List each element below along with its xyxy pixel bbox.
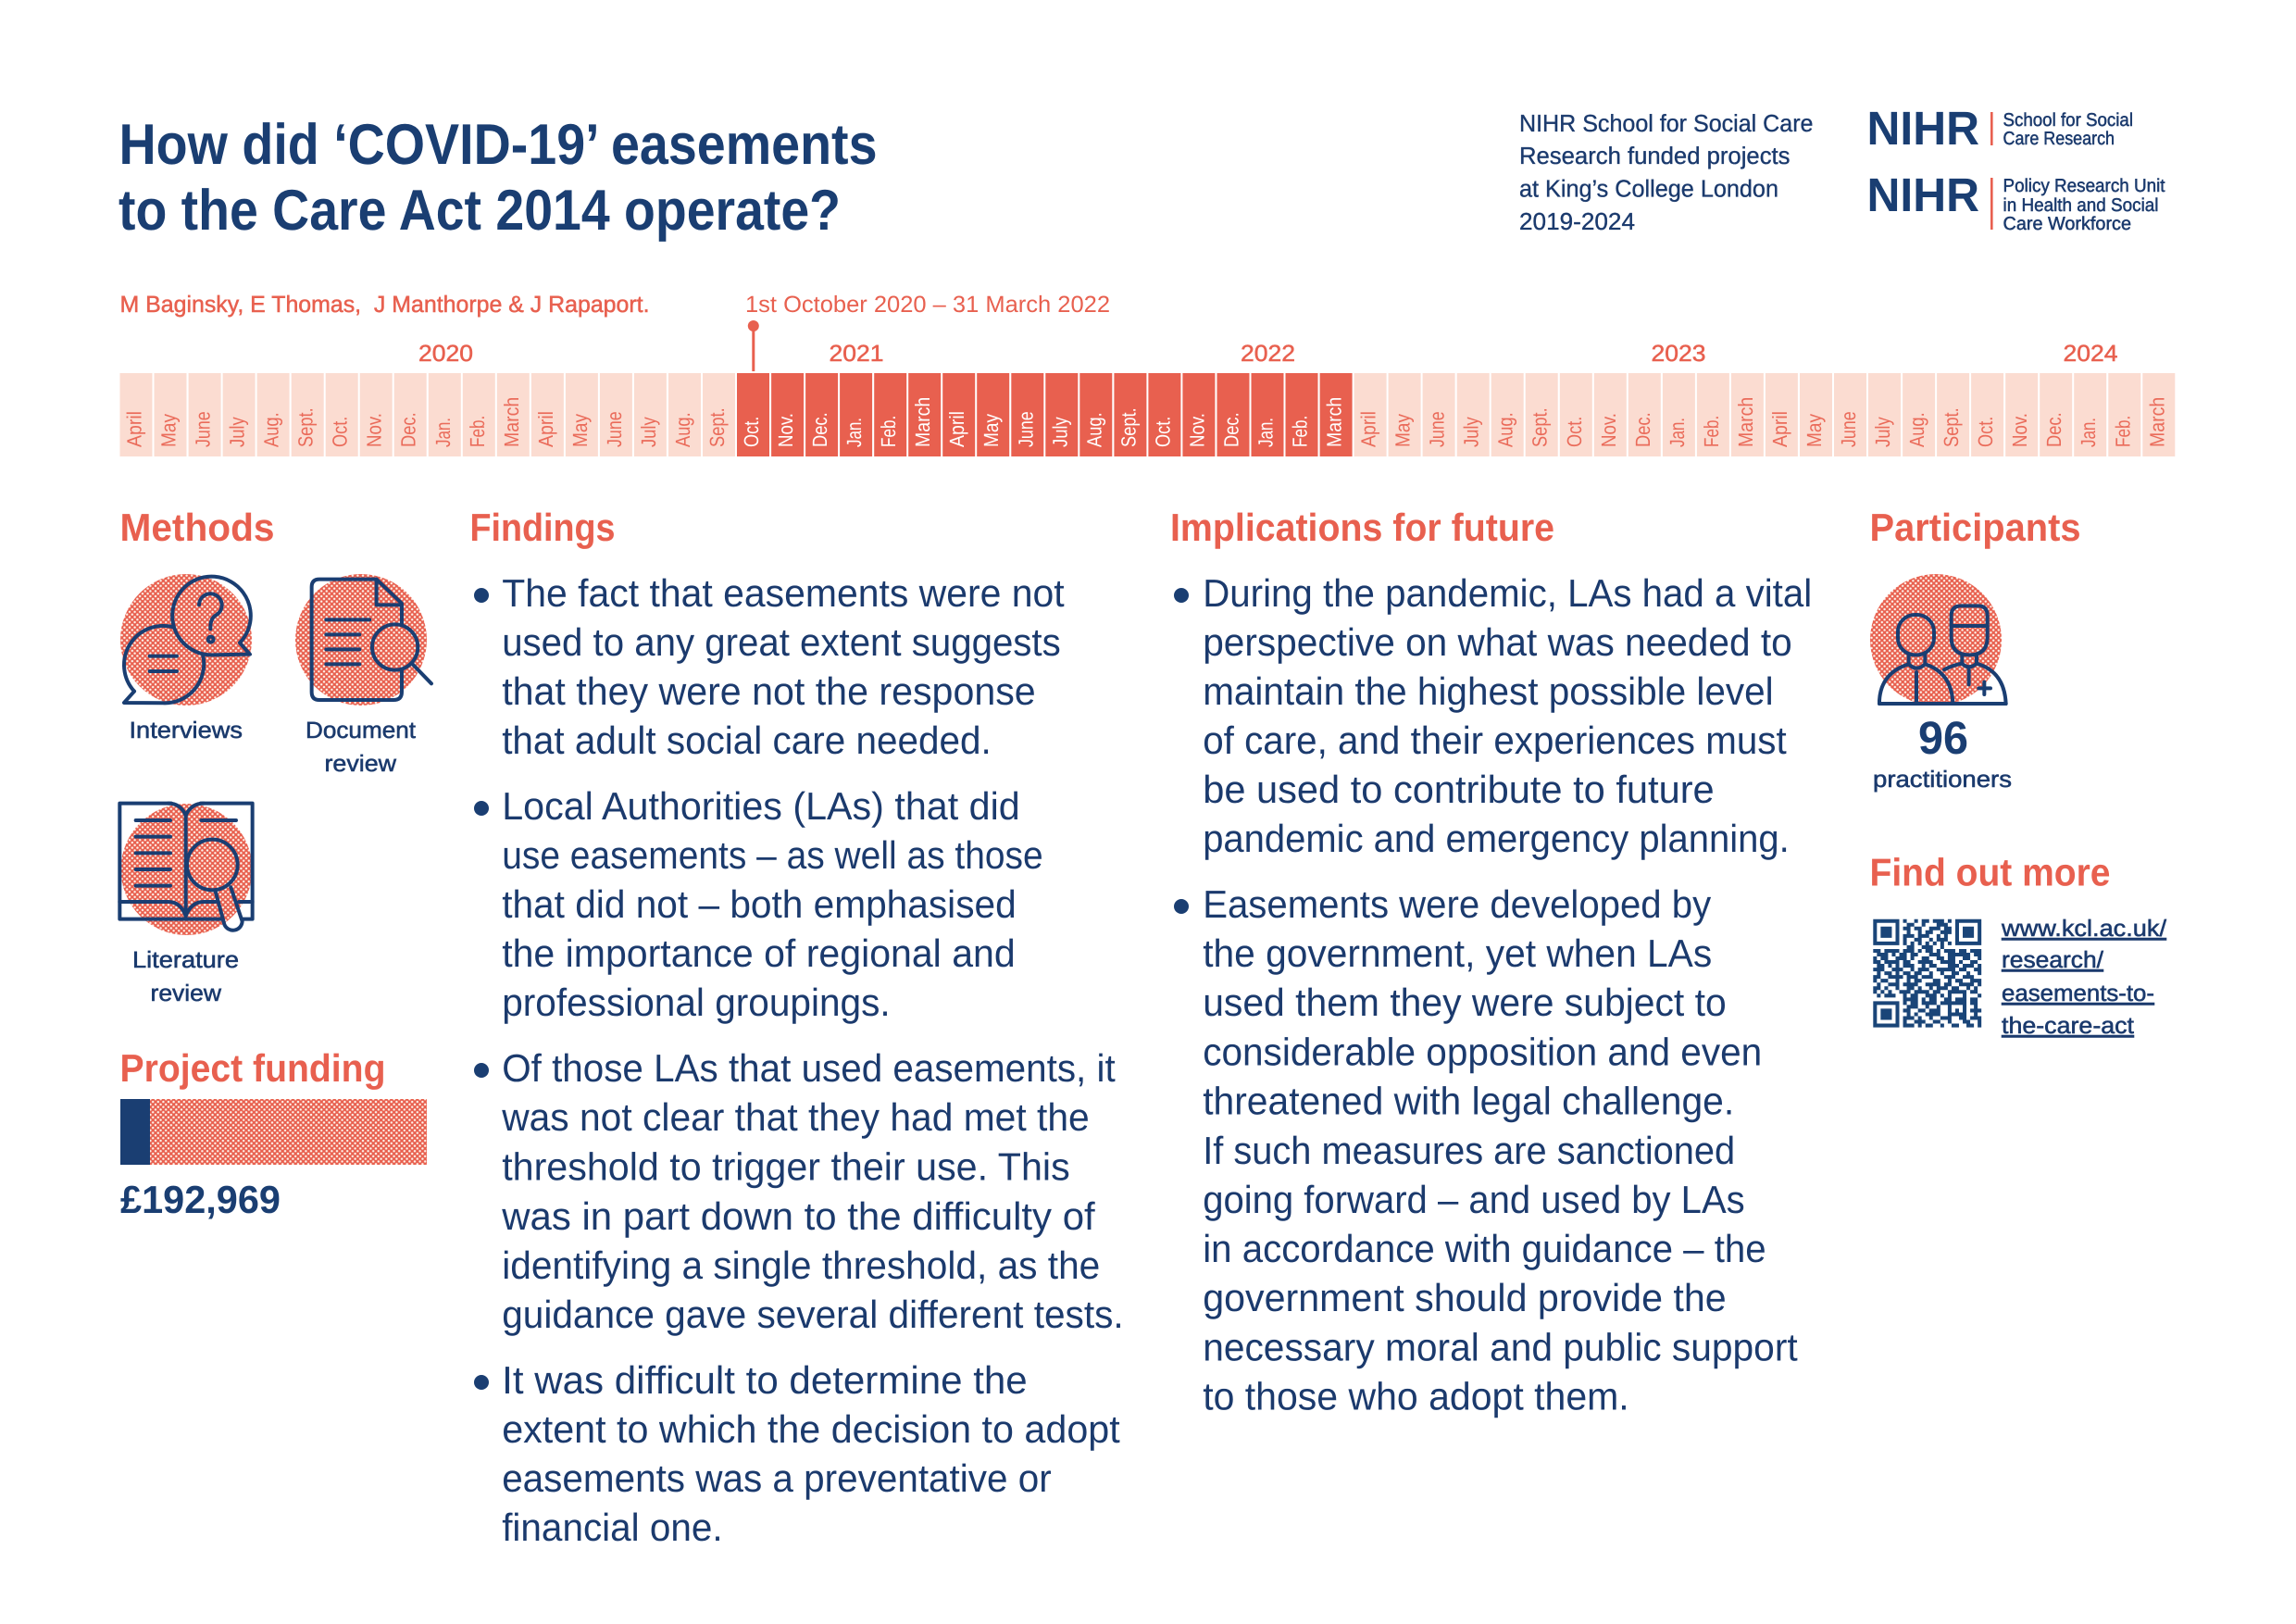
implication 2: If such measures are sanctioned [1203,1129,1735,1172]
timeline of months: Aug. [1082,412,1105,447]
authors: M Baginsky, E Thomas, J Manthorpe & J Rapaport. [120,292,650,318]
implication 2: to those who adopt them. [1203,1374,1629,1418]
timeline of months: April [945,411,968,447]
year labels: 2023 [1652,341,1705,367]
timeline of months: Sept. [1940,407,1963,447]
funding statement: Research funded projects [1519,142,1791,169]
finding 4: It was difficult to determine the [502,1358,1028,1402]
implication 2: in accordance with guidance – the [1203,1227,1766,1270]
timeline of months: May [980,414,1003,447]
period marker pin [748,320,759,371]
timeline of months: Dec. [397,412,420,447]
timeline of months: July [226,417,249,447]
timeline of months: Oct. [1974,417,1997,447]
funding statement: 2019-2024 [1519,207,1635,235]
finding 2: use easements – as well as those [502,833,1043,877]
finding 3: was not clear that they had met the [501,1095,1090,1139]
timeline of months: Sept. [294,407,318,447]
timeline of months: April [122,411,146,447]
timeline of months: Dec. [1631,412,1654,447]
implication 2: considerable opposition and even [1203,1030,1762,1074]
timeline of months: March [2145,397,2168,447]
timeline of months: Aug. [1494,412,1517,447]
implication 2: used them they were subject to [1203,981,1727,1024]
finding 2: Local Authorities (LAs) that did [502,784,1020,828]
panel: project funding [120,1046,427,1221]
icon: document review [295,574,431,706]
implication 2: government should provide the [1203,1276,1727,1319]
label: document review [306,718,416,777]
timeline of months: June [1837,411,1860,447]
heading: implications for future: Implications for future [1170,506,1554,549]
QR code [1873,921,1981,1026]
timeline of months: March [500,397,523,447]
link: project web address [2001,916,2166,1039]
timeline of months: May [1803,414,1826,447]
finding 1: that they were not the response [502,669,1036,713]
timeline of months: Aug. [1905,412,1928,447]
logo: NIHR School for Social Care Research: Care Research [2003,129,2115,149]
funding amount: £192,969 [120,1178,281,1221]
title: to the Care Act 2014 operate? [119,179,841,243]
funding statement: at King’s College London [1519,174,1778,202]
timeline of months: Dec. [808,412,831,447]
finding 3: Of those LAs that used easements, it [502,1046,1116,1090]
timeline of months: Oct. [1151,417,1174,447]
link: project web address: www.kcl.ac.uk/ [2001,916,2166,942]
logo: NIHR Policy Research Unit: Care Workforce [2003,214,2131,234]
timeline of months: Oct. [329,417,352,447]
finding 4: financial one. [502,1505,723,1549]
timeline of months: May [1391,414,1415,447]
finding 2: professional groupings. [502,981,891,1024]
easement period label: 1st October 2020 – 31 March 2022 [745,292,1110,318]
implication 2: Easements were developed by [1203,882,1711,926]
timeline of months: Feb. [466,416,489,447]
finding 1: used to any great extent suggests [502,620,1061,664]
finding 4 [474,1358,1120,1549]
finding 1: that adult social care needed. [502,718,992,762]
implication 2 [1174,882,1798,1418]
timeline of months: Dec. [2042,412,2065,447]
heading: methods: Methods [120,506,274,549]
timeline of months: April [534,411,557,447]
implication 1 [1174,571,1812,860]
logo: NIHR School for Social Care Research: NIHR [1866,102,1979,155]
timeline of months: Jan. [1254,418,1278,447]
panel: findings [470,506,1124,1549]
timeline of months: March [1734,397,1757,447]
panel: participants [1870,506,2081,793]
label: document review: Document [306,718,416,743]
timeline of months: Feb. [1700,416,1723,447]
timeline of months: Oct. [740,417,763,447]
title [119,113,878,243]
finding 3: guidance gave several different tests. [502,1293,1124,1336]
link: project web address: the-care-act [2002,1013,2134,1039]
funding statement [1519,109,1813,235]
timeline of months: Nov. [2008,413,2031,447]
finding 2: that did not – both emphasised [502,882,1017,926]
title: How did ‘COVID-19’ easements [119,113,878,177]
heading: findings: Findings [470,506,615,549]
timeline of months: Nov. [1597,413,1620,447]
link: project web address: research/ [2002,947,2103,973]
label: document review: review [324,751,397,777]
heading: participants: Participants [1870,506,2081,549]
finding 3 [474,1046,1124,1336]
timeline of months: Sept. [1529,407,1552,447]
label: literature review: Literature [132,947,239,973]
timeline of months: March [1323,397,1346,447]
logo: NIHR Policy Research Unit [1866,169,2165,234]
timeline of months: Nov. [1185,413,1208,447]
year labels: 2020 [418,341,473,367]
finding 2: the importance of regional and [502,931,1016,975]
participant count: 96 [1918,712,1968,764]
timeline of months: Sept. [1117,407,1140,447]
timeline of months: Oct. [1563,417,1586,447]
finding 3: was in part down to the difficulty of [501,1194,1095,1238]
implication 1: of care, and their experiences must [1203,718,1787,762]
timeline of months: April [1357,411,1380,447]
timeline of months: May [568,414,592,447]
label: literature review [132,947,239,1006]
implication 2: threatened with legal challenge. [1203,1080,1734,1122]
label: practitioners: practitioners [1873,767,2012,793]
implication 1: be used to contribute to future [1203,768,1715,811]
timeline of months: Nov. [774,413,797,447]
timeline of months: July [637,417,660,447]
logo: NIHR Policy Research Unit: NIHR [1866,169,1979,221]
implication 1: During the pandemic, LAs had a vital [1203,571,1812,615]
timeline of months: March [911,397,934,447]
finding 1 [474,571,1065,762]
timeline of months: Feb. [877,416,900,447]
timeline of months: Feb. [1289,416,1311,447]
timeline of months: April [1768,411,1791,447]
implication 2: going forward – and used by LAs [1203,1178,1745,1221]
funding statement: NIHR School for Social Care [1519,109,1813,137]
timeline of months: Nov. [363,413,386,447]
timeline of months: June [603,411,626,447]
label: literature review: review [150,981,222,1006]
timeline of months: Jan. [2077,418,2100,447]
timeline of months: June [192,411,215,447]
logo: NIHR School for Social Care Research [1866,102,2133,155]
timeline of months: Aug. [260,412,283,447]
finding 4: easements was a preventative or [502,1456,1052,1500]
year labels: 2021 [830,341,883,367]
timeline of months [120,373,2175,456]
logo: NIHR Policy Research Unit: Policy Research Unit [2003,176,2165,196]
icon: practitioners [1870,574,2006,706]
finding 2 [474,784,1043,1024]
icon: literature review [119,804,253,935]
timeline of months: May [157,414,180,447]
timeline of months: July [1048,417,1071,447]
implication 1: maintain the highest possible level [1203,669,1774,713]
year labels: 2022 [1241,341,1295,367]
heading: find out more: Find out more [1870,850,2111,894]
timeline of months: Sept. [705,407,729,447]
timeline of months: Dec. [1220,412,1242,447]
panel: implications for future [1170,506,1812,1418]
timeline of months: Jan. [842,418,866,447]
finding 3: identifying a single threshold, as the [502,1243,1100,1287]
implication 2: the government, yet when LAs [1203,931,1712,975]
year labels [418,341,2118,367]
timeline of months: June [1014,411,1037,447]
panel: methods [119,506,431,1006]
implication 1: perspective on what was needed to [1203,620,1792,664]
heading: project funding: Project funding [120,1046,385,1090]
year labels: 2024 [2063,341,2118,367]
timeline of months: Feb. [2111,416,2134,447]
link: project web address: easements-to- [2002,981,2154,1006]
finding 4: extent to which the decision to adopt [502,1407,1120,1451]
finding 3: threshold to trigger their use. This [502,1144,1070,1189]
implication 1: pandemic and emergency planning. [1203,817,1790,860]
label: interviews: Interviews [130,718,243,743]
funding bar [120,1099,427,1165]
finding 1: The fact that easements were not [502,571,1065,615]
timeline of months: Jan. [1666,418,1689,447]
icon: interviews [120,574,252,706]
logo: NIHR School for Social Care Research: School for Social [2003,110,2133,131]
implication 2: necessary moral and public support [1203,1326,1798,1368]
timeline of months: Aug. [671,412,694,447]
logo: NIHR Policy Research Unit: in Health and Social [2003,195,2159,216]
panel: find out more [1870,850,2166,1039]
timeline of months: Jan. [431,418,455,447]
timeline of months: July [1871,417,1894,447]
timeline of months: July [1460,417,1483,447]
timeline of months: June [1426,411,1449,447]
